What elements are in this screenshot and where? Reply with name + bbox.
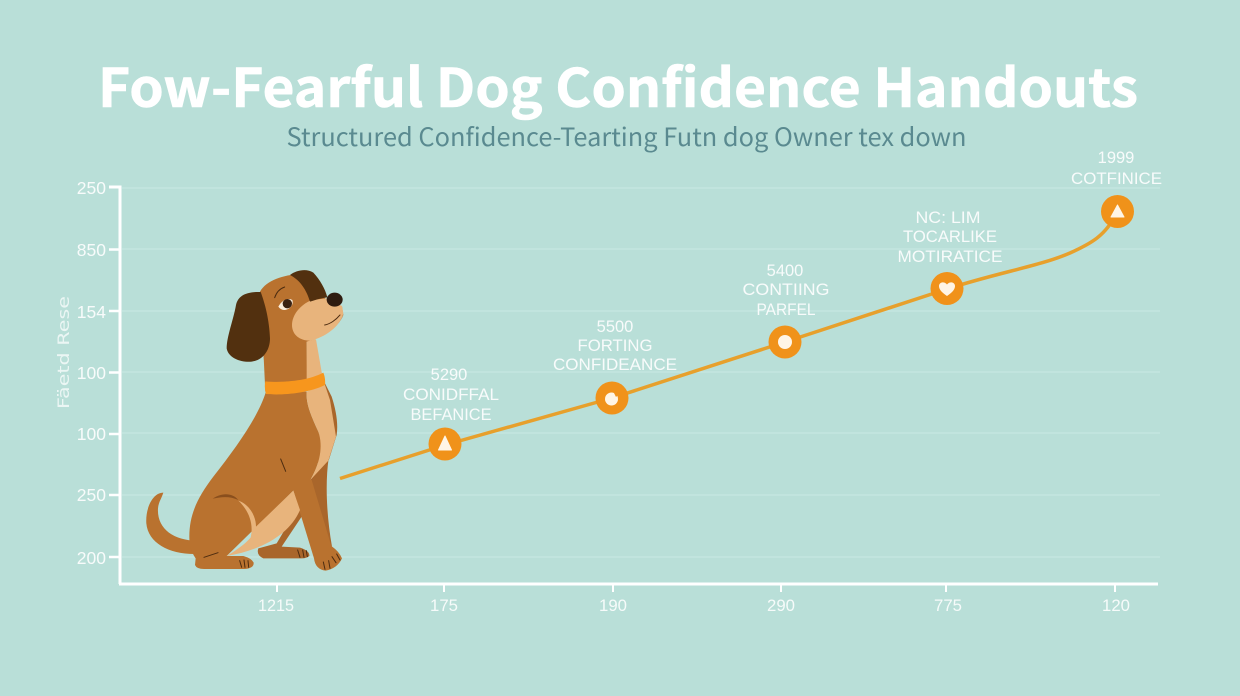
dog collar xyxy=(265,373,325,394)
milestone 4: MOTIRATICE xyxy=(898,248,1002,266)
x axis: 1215 xyxy=(258,596,294,615)
y axis: 250 xyxy=(77,485,106,505)
y axis xyxy=(77,178,120,584)
x axis: 120 xyxy=(1102,596,1130,615)
milestone 1 xyxy=(403,366,499,460)
milestone 4 xyxy=(898,209,1002,305)
milestone 5: COTFINICE xyxy=(1071,170,1162,188)
x axis: 290 xyxy=(767,596,795,615)
dog tail xyxy=(146,493,197,554)
milestone 2: CONFIDEANCE xyxy=(553,356,677,374)
y axis: 850 xyxy=(77,240,106,260)
dog facial details xyxy=(204,287,340,569)
milestone 2: 5500 xyxy=(597,318,633,336)
dog eye xyxy=(278,299,293,310)
y axis: 250 xyxy=(77,178,106,198)
dog muzzle xyxy=(292,298,343,341)
milestone 4: NC: LIM xyxy=(916,209,980,227)
subtitle: Structured Confidence-Tearting Futn dog Owner tex down xyxy=(286,118,967,154)
dog haunch shadow xyxy=(213,494,238,500)
x axis: 190 xyxy=(599,596,627,615)
x axis xyxy=(119,584,1158,615)
dog body xyxy=(189,392,342,571)
milestone 3: CONTIING xyxy=(742,281,830,299)
dog nose xyxy=(327,293,343,307)
y axis: 154 xyxy=(77,302,106,322)
milestone 1: CONIDFFAL xyxy=(403,386,499,404)
milestone 1: BEFANICE xyxy=(410,406,492,424)
dog far legs xyxy=(258,383,337,558)
milestone 3: PARFEL xyxy=(756,301,816,319)
y axis: 100 xyxy=(77,424,106,444)
icon: seated dog xyxy=(146,270,343,571)
y axis: 100 xyxy=(77,363,106,383)
milestone 5 xyxy=(1071,149,1162,228)
milestone 4: TOCARLIKE xyxy=(903,228,997,246)
dog thigh highlight xyxy=(238,501,256,537)
dog head patch xyxy=(290,270,327,302)
milestone 2: FORTING xyxy=(578,337,652,355)
dog ear xyxy=(227,292,270,362)
confidence trend line xyxy=(340,212,1117,478)
milestone 5: 1999 xyxy=(1098,149,1134,167)
y axis: 200 xyxy=(77,548,106,568)
dog head xyxy=(260,274,343,360)
milestone 2 xyxy=(553,318,677,414)
y axis title: Fäetd Rese xyxy=(54,296,73,409)
x axis: 175 xyxy=(430,596,458,615)
title: Fow-Fearful Dog Confidence Handouts xyxy=(98,47,1138,123)
milestone 3: 5400 xyxy=(767,262,803,280)
dog chest xyxy=(307,385,336,480)
x axis: 775 xyxy=(934,596,962,615)
dog belly xyxy=(227,491,300,556)
dog neck xyxy=(263,340,307,392)
milestone 3 xyxy=(742,262,830,358)
milestone 1: 5290 xyxy=(431,366,467,384)
